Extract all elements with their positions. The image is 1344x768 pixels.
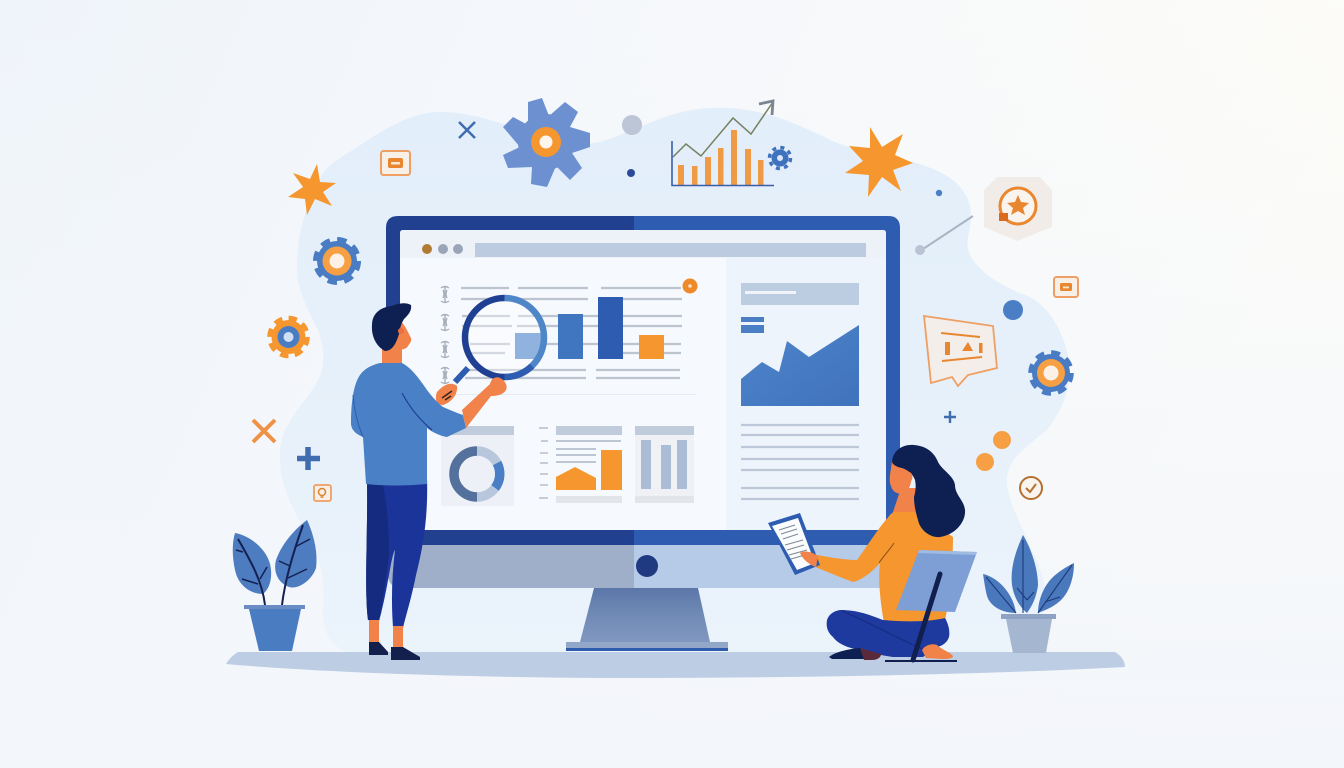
icon: x orange	[253, 420, 275, 442]
woman	[768, 445, 977, 662]
head	[372, 303, 411, 351]
grey bar card	[635, 426, 694, 503]
shirt	[351, 363, 466, 486]
axis glyphs	[441, 286, 449, 384]
area chart	[741, 325, 859, 406]
floor	[226, 652, 1125, 678]
background blob	[280, 108, 1070, 652]
notification dot	[682, 278, 698, 294]
screen	[400, 230, 886, 530]
neck	[382, 345, 402, 365]
board stand	[885, 574, 957, 662]
tablet	[768, 513, 820, 575]
gear blue left	[316, 240, 358, 282]
text lines	[741, 425, 859, 499]
handle	[455, 368, 468, 382]
browser bar	[400, 230, 886, 258]
mixed chart card	[539, 426, 622, 503]
hand	[800, 552, 818, 567]
arm	[815, 513, 893, 582]
gear orange left	[270, 318, 308, 356]
monitor chin	[388, 545, 900, 588]
speech box	[924, 316, 997, 386]
small dot	[627, 169, 635, 177]
monitor	[386, 216, 900, 651]
star right	[845, 127, 913, 197]
face	[890, 460, 912, 494]
trousers	[827, 610, 949, 657]
pointer line	[915, 216, 973, 255]
man	[351, 303, 507, 660]
gear blue right	[1030, 352, 1072, 394]
donut card	[441, 426, 514, 506]
orange dots	[976, 431, 1011, 471]
forearm	[462, 377, 507, 428]
large gear	[503, 98, 590, 187]
magnifier	[455, 298, 544, 382]
table lines	[461, 288, 682, 378]
foot	[922, 644, 953, 659]
blue circle right	[1003, 300, 1023, 320]
hair	[892, 445, 965, 537]
trousers	[366, 478, 427, 628]
small icon bulb	[314, 485, 331, 501]
plant right	[983, 535, 1074, 653]
right side panel	[726, 258, 886, 530]
back hand	[436, 384, 457, 405]
plant left	[233, 520, 317, 651]
shoe	[829, 648, 868, 659]
side panel header	[741, 283, 859, 333]
neck	[892, 488, 918, 515]
power button	[636, 555, 658, 577]
bar chart	[558, 297, 664, 359]
small icon card right	[1054, 277, 1078, 297]
highlighted bar	[515, 333, 541, 359]
monitor frame	[386, 216, 900, 545]
grey circle	[622, 115, 642, 135]
ear	[906, 472, 912, 482]
divider	[441, 394, 696, 395]
monitor stand	[566, 588, 728, 651]
star badge	[984, 177, 1052, 241]
shoes	[369, 620, 420, 660]
board	[896, 550, 977, 612]
small icon card top left	[381, 151, 410, 175]
icon: plus small	[944, 411, 956, 423]
torso	[879, 512, 953, 623]
icon: x blue	[459, 122, 475, 138]
small gear	[770, 148, 790, 168]
small dot right	[936, 190, 942, 196]
icon: plus blue	[297, 447, 320, 470]
check icon	[1020, 477, 1042, 499]
star left	[288, 164, 336, 215]
growth chart icon	[672, 101, 774, 186]
